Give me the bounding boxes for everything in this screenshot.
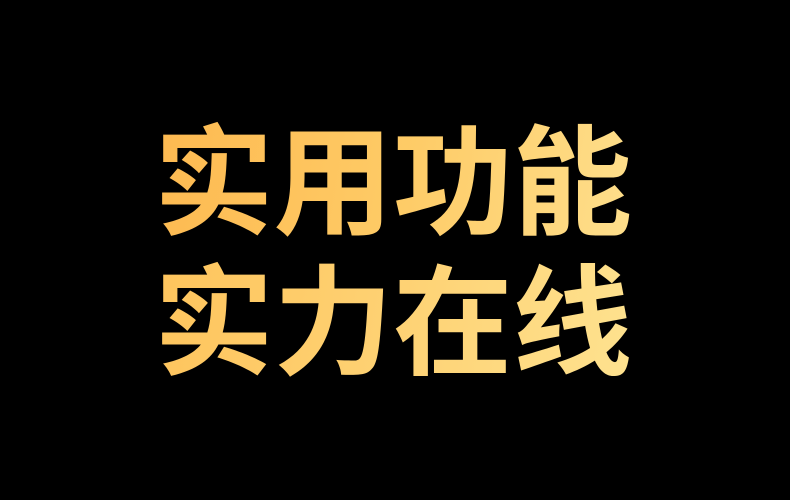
- title line 1: 实用功能: [154, 118, 632, 251]
- title line 2: 实力在线: [154, 258, 632, 391]
- title: [154, 118, 632, 391]
